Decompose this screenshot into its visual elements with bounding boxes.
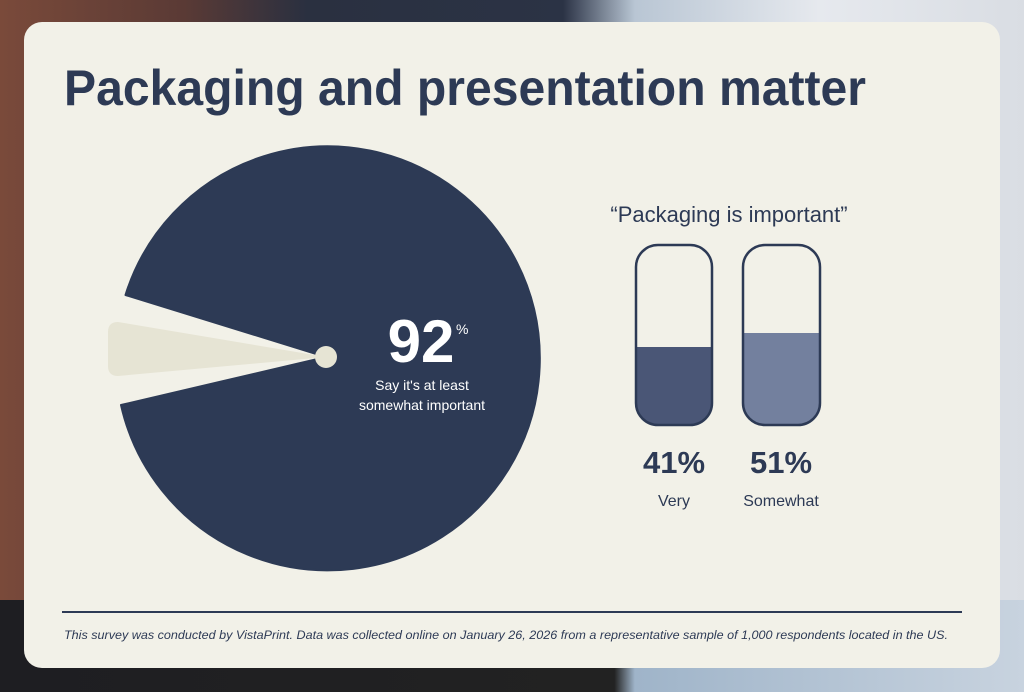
pie label: 92: [388, 308, 454, 375]
pill chart: very 41%: 41%: [643, 445, 705, 480]
pill chart: somewhat 51%: Somewhat: [743, 493, 819, 510]
pill chart: very 41%: [636, 245, 712, 510]
pill chart: somewhat 51%: 51%: [750, 445, 812, 480]
pill chart: very 41%: Very: [658, 493, 690, 510]
pie label: [359, 308, 485, 413]
pill chart: somewhat 51%: [743, 245, 820, 510]
footer note: This survey was conducted by VistaPrint. Data was collected online on January 26, 2026 from a representative sample of 1,000 respondents located in the US.: [64, 630, 948, 642]
pie label: Say it's at least: [375, 377, 469, 393]
pie chart: 92%: [108, 146, 540, 570]
pie label: %: [456, 321, 468, 337]
pie label: somewhat important: [359, 397, 485, 413]
subtitle: packaging is important: “Packaging is important”: [610, 202, 848, 227]
title: Packaging and presentation matter: [64, 60, 866, 116]
